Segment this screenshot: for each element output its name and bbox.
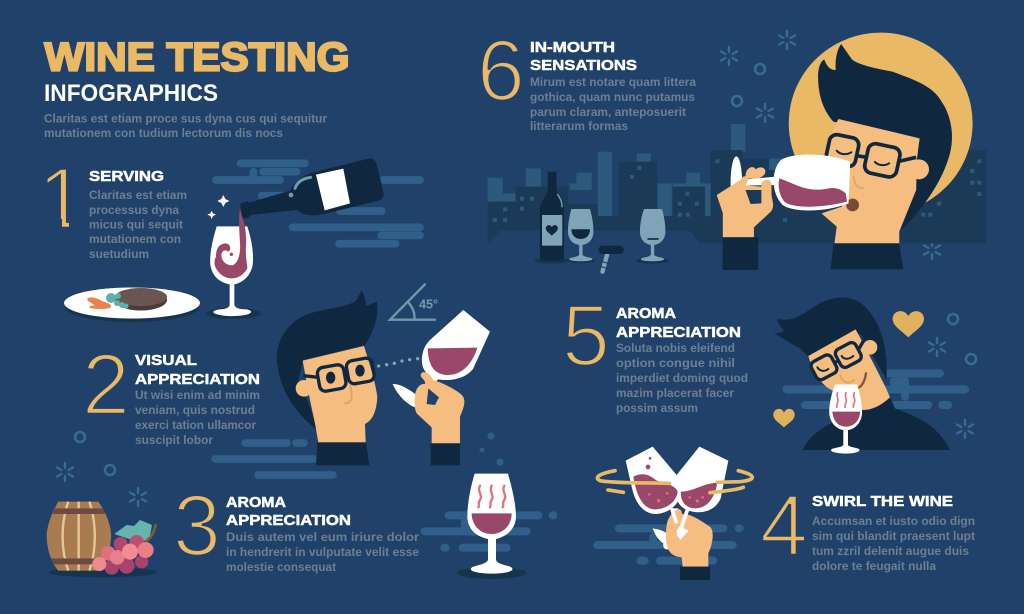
illustration: man inspecting wine [277,284,490,465]
wine glass [206,207,261,319]
heading: SERVING [89,169,164,185]
body [226,530,419,574]
number 3: 3 [173,478,221,574]
stems and bases [653,508,701,549]
body: tum zzril delenit augue duis [812,544,969,558]
body [89,188,187,261]
number 5: 5 [562,288,610,384]
body: suscipit lobor [135,433,213,447]
step 3: aroma appreciation text: APPRECIATION [226,513,351,529]
hand [415,372,464,443]
hearts [893,311,924,337]
body: possim assum [616,401,698,415]
glass [829,384,862,454]
heading: SWIRL THE WINE [812,494,953,510]
hair [774,297,887,380]
hair [277,290,377,430]
glass with wine [568,209,593,261]
cuff [680,567,710,580]
illustration: wine glass with aroma [425,474,553,579]
decorative sparkles and rings [57,31,976,506]
illustration: swirling glasses [597,447,752,580]
step 2: visual appreciation text: APPRECIATION [135,372,260,388]
right glass [675,447,728,512]
collar [831,243,903,269]
body: Soluta nobis eleifend [616,341,735,355]
body: mutationem con [89,232,181,246]
bottle [540,172,564,261]
barrel [47,502,111,571]
heading: AROMA [226,495,287,511]
clouds near man 2 [215,443,333,475]
clouds [216,163,420,244]
clouds [425,515,553,548]
step 3: aroma appreciation text [173,478,419,574]
leaf and stem [145,524,156,542]
heading: VISUAL [135,353,197,369]
wine [214,207,247,278]
body: Ut wisi enim ad minim [135,388,260,402]
body [616,341,748,415]
title: WINE TESTING [44,36,350,80]
sparkles [207,195,229,219]
illustration: barrel and grapes [47,502,157,577]
empty glass [640,209,665,261]
body [803,397,950,450]
clouds [597,528,740,561]
body: gothica, quam nunc putamus [530,90,695,104]
body: exerci tation ullamcor [135,418,256,432]
glass [467,474,516,574]
mouth [846,199,859,211]
number 1: 1 [38,151,86,247]
step 6: in-mouth sensations text: SENSATIONS [530,58,637,74]
gold swirl lines [597,471,752,493]
step 5: aroma appreciation text [562,288,748,415]
wine glass [731,155,850,210]
body: sim qui blandit praesent lupt [812,529,975,543]
wine [472,513,512,534]
hand [717,167,773,237]
sight dots [377,357,419,368]
body: Duis autem vel eum iriure dolor [226,530,419,544]
glasses [303,357,375,392]
heading: IN-MOUTH [530,40,615,56]
number 4: 4 [760,478,808,574]
body: suetudium [89,247,149,261]
angle symbol [390,284,438,320]
grapes [92,535,154,575]
hand [666,509,713,567]
body [812,514,975,573]
collar [316,442,369,465]
number 2: 2 [82,337,130,433]
body [135,388,260,447]
heading: AROMA [616,306,677,322]
wine glass [393,310,490,407]
corkscrew [598,246,624,272]
table items [534,172,669,272]
body: Claritas est etiam [89,188,187,202]
number 6: 6 [477,23,525,119]
bottle [240,158,384,219]
face [296,346,377,442]
illustration: man smelling wine [773,297,965,454]
intro text [44,112,327,140]
body: processus dyna [89,203,179,217]
left glass [626,447,682,514]
sun [789,33,973,214]
body: parum claram, anteposuerit [530,105,686,119]
wine [633,457,717,509]
body: molestie consequat [226,560,336,574]
body: mazim placerat facer [616,386,734,400]
face [822,119,929,244]
body: micus qui sequit [89,218,183,232]
body: dolore te feugait nulla [812,559,936,573]
body: in hendrerit in vulputate velit esse [226,545,419,559]
face [808,329,890,410]
illustration: steak plate [64,288,200,322]
cuff [722,237,758,270]
body: litterarum formas [530,119,628,133]
glasses [809,340,864,381]
illustration: pouring bottle and glass [206,158,420,319]
step 5: aroma appreciation text: APPRECIATION [616,325,741,341]
angle symbol: 45° [419,298,438,312]
subtitle: INFOGRAPHICS [44,80,218,107]
step 6: in-mouth sensations text [477,23,696,133]
step 2: visual appreciation text [82,337,260,447]
body: imperdiet doming quod [616,371,748,385]
clouds [787,373,965,405]
cuff [431,443,460,465]
step 1: serving text [38,151,187,261]
intro text: mutationem con tudium lectorum dis nocs [44,126,283,140]
illustration: city, table and drinking man [488,33,986,272]
hair [818,44,952,232]
body: Accumsan et iusto odio dign [812,514,975,528]
glasses [825,133,916,178]
body [530,75,696,133]
body: veniam, quis nostrud [135,403,255,417]
body: option congue nihil [616,356,735,370]
aroma waves [478,486,505,507]
skyline [488,124,986,243]
body: Mirum est notare quam littera [530,75,696,89]
step 4: swirl the wine text [760,478,975,574]
intro text: Claritas est etiam proce sus dyna cus qui sequitur [44,112,327,126]
